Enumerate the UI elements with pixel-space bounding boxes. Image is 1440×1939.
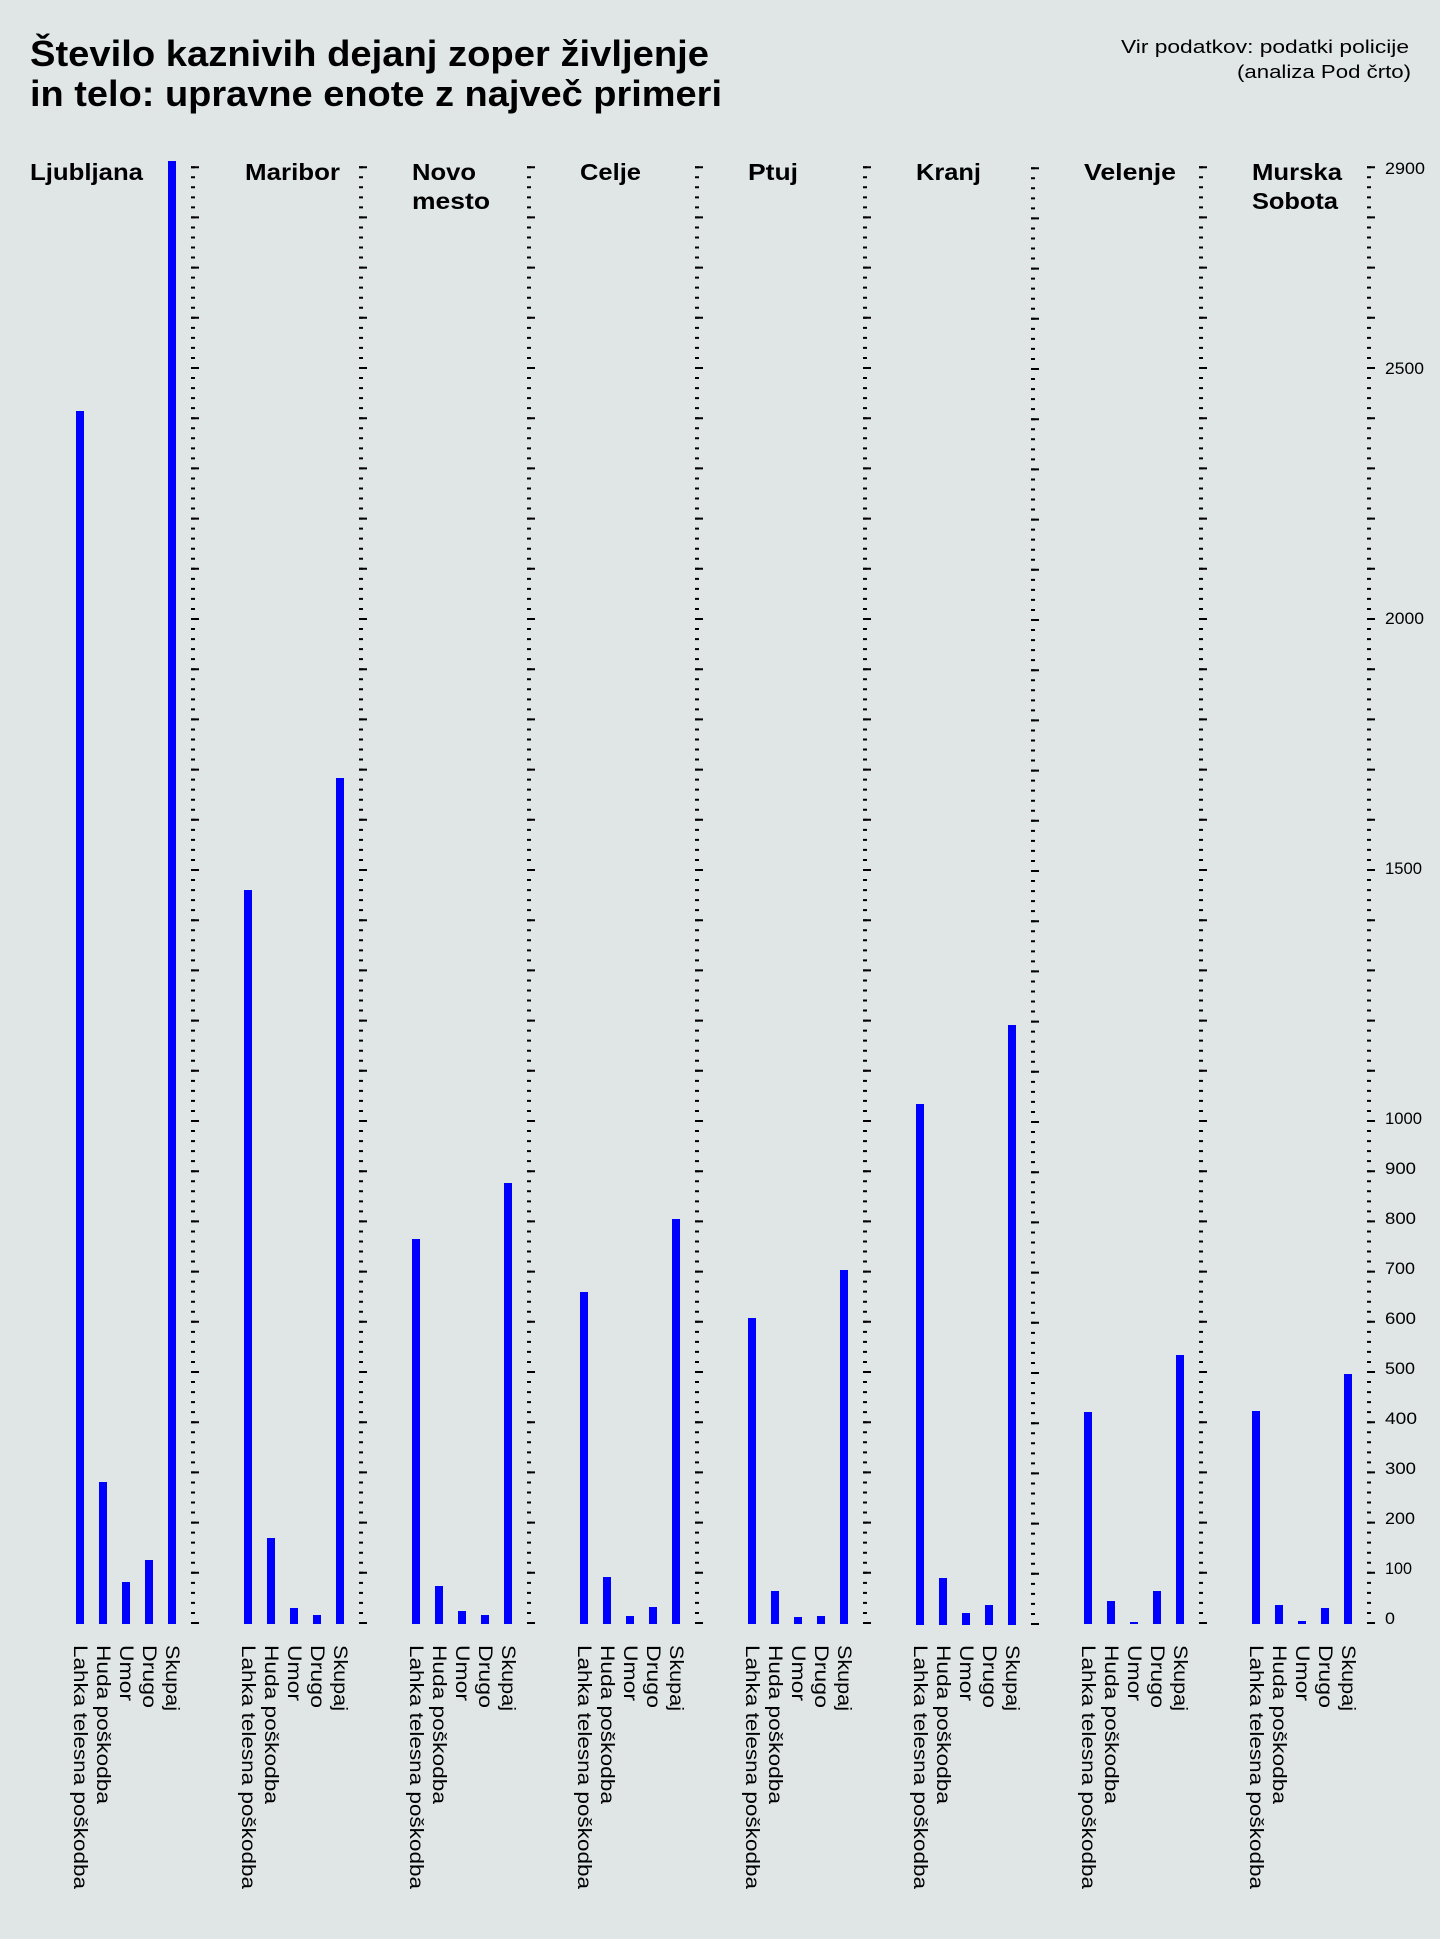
category labels: Ljubljana: Umor	[115, 1645, 136, 1702]
heading: Ptuj: Ptuj	[748, 159, 798, 185]
bars: Velenje	[1084, 1355, 1184, 1624]
title: Število kaznivih dejanj zoper življenje	[30, 32, 709, 74]
value axis labels: 2900	[1385, 160, 1425, 178]
panel: Murska Sobota	[1245, 159, 1371, 1890]
category labels: Ljubljana: Drugo	[138, 1645, 159, 1708]
category labels: Maribor: Huda poškodba	[260, 1645, 281, 1805]
category labels: Ptuj: Skupaj	[833, 1645, 854, 1711]
heading: Ljubljana: Ljubljana	[30, 159, 144, 185]
heading: Novo mesto	[412, 159, 490, 214]
value axis labels: 800	[1385, 1210, 1416, 1228]
axis ticks: Celje	[697, 166, 699, 1624]
axis ticks: Maribor	[361, 166, 363, 1624]
axis ticks: Ljubljana	[193, 166, 195, 1624]
source note: Vir podatkov: podatki policije	[1121, 36, 1409, 57]
value axis labels: 1500	[1385, 860, 1422, 878]
bars: Maribor	[244, 778, 344, 1624]
category labels: Murska Sobota: Drugo	[1314, 1645, 1335, 1708]
category labels: Ljubljana: Lahka telesna poškodba	[69, 1645, 90, 1890]
category labels: Kranj: Drugo	[978, 1645, 999, 1708]
category labels: Maribor	[237, 1645, 350, 1890]
category labels: Novo mesto: Skupaj	[497, 1645, 518, 1711]
axis ticks: Velenje	[1201, 166, 1203, 1624]
panel: Celje	[573, 159, 699, 1890]
bars: Murska Sobota	[1252, 1374, 1352, 1624]
value axis labels: 0	[1385, 1610, 1395, 1628]
axis ticks: Novo mesto	[529, 166, 531, 1624]
panel: Kranj	[909, 159, 1035, 1890]
category labels: Ptuj: Umor	[787, 1645, 808, 1702]
source note	[1121, 36, 1411, 82]
value axis labels: 2500	[1385, 360, 1424, 378]
bars: Novo mesto	[412, 1183, 512, 1624]
category labels: Kranj: Umor	[955, 1645, 976, 1702]
value axis labels: 700	[1385, 1260, 1415, 1278]
heading: Novo mesto: mesto	[412, 188, 490, 214]
heading: Murska Sobota	[1252, 159, 1343, 214]
value axis labels: 900	[1385, 1160, 1416, 1178]
bars: Ljubljana	[76, 161, 176, 1624]
category labels: Murska Sobota: Skupaj	[1337, 1645, 1358, 1711]
value axis labels: 400	[1385, 1410, 1417, 1428]
value axis labels	[1385, 160, 1425, 1628]
category labels: Novo mesto	[405, 1645, 518, 1890]
heading: Kranj: Kranj	[916, 159, 981, 185]
value axis labels: 2000	[1385, 610, 1424, 628]
category labels: Ptuj: Huda poškodba	[764, 1645, 785, 1805]
category labels: Novo mesto: Drugo	[474, 1645, 495, 1708]
heading: Novo mesto: Novo	[412, 159, 476, 185]
category labels: Ljubljana: Skupaj	[161, 1645, 182, 1711]
category labels: Ljubljana	[69, 1645, 182, 1890]
heading: Murska Sobota: Sobota	[1252, 188, 1339, 214]
category labels: Maribor: Umor	[283, 1645, 304, 1702]
category labels: Velenje	[1077, 1645, 1190, 1890]
value axis labels: 100	[1385, 1560, 1412, 1578]
value axis labels: 300	[1385, 1460, 1416, 1478]
title: in telo: upravne enote z največ primeri	[30, 73, 722, 114]
category labels: Murska Sobota: Umor	[1291, 1645, 1312, 1702]
axis ticks: Kranj	[1033, 167, 1035, 1625]
category labels: Velenje: Drugo	[1146, 1645, 1167, 1708]
source note: (analiza Pod črto)	[1237, 61, 1411, 82]
heading: Maribor: Maribor	[245, 159, 340, 185]
category labels: Celje: Lahka telesna poškodba	[573, 1645, 594, 1890]
category labels: Celje: Umor	[619, 1645, 640, 1702]
category labels: Velenje: Huda poškodba	[1100, 1645, 1121, 1805]
category labels: Celje: Drugo	[642, 1645, 663, 1708]
panel: Ptuj	[741, 159, 867, 1890]
value axis labels: 500	[1385, 1360, 1415, 1378]
category labels: Ptuj	[741, 1645, 854, 1890]
category labels: Maribor: Lahka telesna poškodba	[237, 1645, 258, 1890]
category labels: Kranj: Lahka telesna poškodba	[909, 1645, 930, 1890]
category labels: Celje: Huda poškodba	[596, 1645, 617, 1805]
bars: Ptuj	[748, 1270, 848, 1624]
category labels: Celje	[573, 1645, 686, 1890]
category labels: Kranj	[909, 1645, 1022, 1890]
bars: Celje	[580, 1219, 680, 1624]
category labels: Novo mesto: Umor	[451, 1645, 472, 1702]
panel: Maribor	[237, 159, 363, 1890]
category labels: Ljubljana: Huda poškodba	[92, 1645, 113, 1805]
title	[30, 32, 722, 114]
category labels: Novo mesto: Lahka telesna poškodba	[405, 1645, 426, 1890]
category labels: Kranj: Skupaj	[1001, 1645, 1022, 1711]
panel: Ljubljana	[30, 159, 195, 1890]
category labels: Ptuj: Drugo	[810, 1645, 831, 1708]
value axis labels: 200	[1385, 1510, 1415, 1528]
category labels: Maribor: Skupaj	[329, 1645, 350, 1711]
panel: Velenje	[1077, 159, 1203, 1890]
category labels: Ptuj: Lahka telesna poškodba	[741, 1645, 762, 1890]
axis ticks: Ptuj	[865, 166, 867, 1624]
category labels: Murska Sobota	[1245, 1645, 1358, 1890]
value axis labels: 1000	[1385, 1110, 1422, 1128]
heading: Murska Sobota: Murska	[1252, 159, 1343, 185]
panel: Novo mesto	[405, 159, 531, 1890]
category labels: Celje: Skupaj	[665, 1645, 686, 1711]
heading: Velenje: Velenje	[1084, 159, 1176, 185]
category labels: Murska Sobota: Lahka telesna poškodba	[1245, 1645, 1266, 1890]
bars: Kranj	[916, 1025, 1016, 1625]
category labels: Velenje: Skupaj	[1169, 1645, 1190, 1711]
category labels: Novo mesto: Huda poškodba	[428, 1645, 449, 1805]
category labels: Velenje: Umor	[1123, 1645, 1144, 1702]
heading: Celje: Celje	[580, 159, 641, 185]
category labels: Velenje: Lahka telesna poškodba	[1077, 1645, 1098, 1890]
axis ticks: Murska Sobota	[1369, 166, 1371, 1624]
value axis labels: 600	[1385, 1310, 1416, 1328]
category labels: Kranj: Huda poškodba	[932, 1645, 953, 1805]
category labels: Murska Sobota: Huda poškodba	[1268, 1645, 1289, 1805]
category labels: Maribor: Drugo	[306, 1645, 327, 1708]
